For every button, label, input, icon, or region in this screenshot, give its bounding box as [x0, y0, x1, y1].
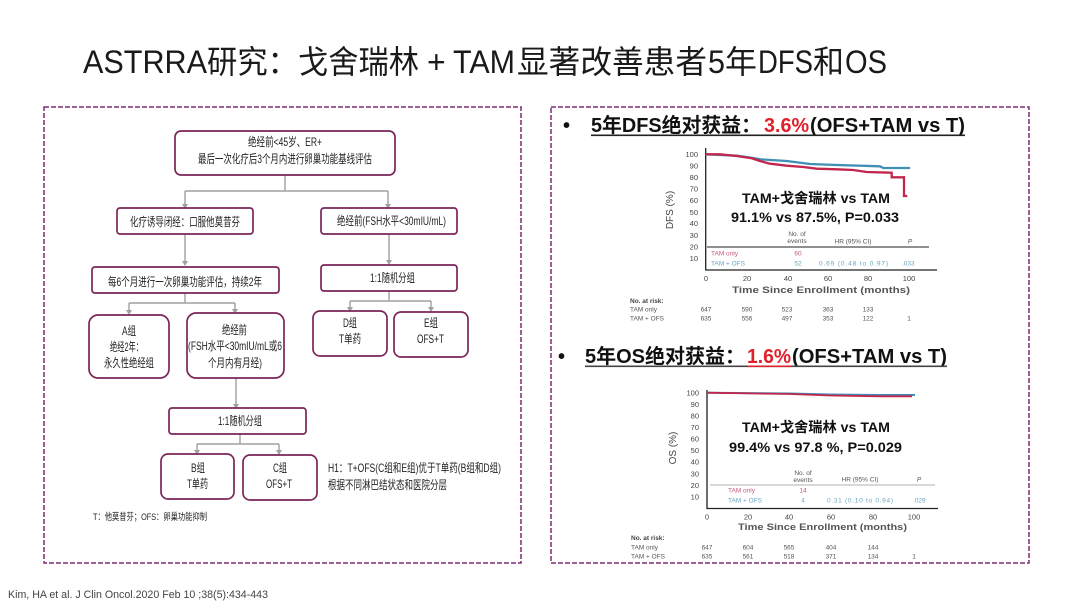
x axis labels [705, 512, 920, 522]
embedded table: P [908, 238, 913, 246]
hypothesis note: 根据不同淋巴结状态和医院分层 [328, 478, 447, 492]
box: group A: A组 [122, 324, 136, 338]
embedded table: P [917, 476, 922, 484]
y axis title: DFS (%) [665, 191, 676, 229]
title: DFS [758, 44, 813, 80]
x axis labels: 40 [784, 274, 792, 283]
x axis labels: 0 [704, 274, 708, 283]
x axis labels: 60 [827, 512, 835, 522]
heading: OS benefit: (OFS+TAM vs T) [792, 346, 947, 368]
at-risk table: 1 [912, 554, 916, 560]
curve: TAM + OFS [706, 154, 910, 168]
box: ovarian function assessment [92, 267, 279, 293]
at-risk table: 647 [701, 306, 712, 314]
y axis labels: 90 [691, 400, 699, 409]
y axis labels: 50 [691, 446, 699, 455]
panel: study design flowchart [44, 107, 521, 563]
embedded table: .033 [902, 260, 915, 268]
at-risk table: 1 [907, 316, 911, 322]
x axis labels: 100 [908, 512, 920, 522]
heading: DFS benefit: • [563, 115, 570, 137]
heading: DFS benefit: 5年DFS绝对获益： [591, 113, 761, 137]
embedded table: 14 [799, 488, 807, 494]
heading: OS benefit: • [558, 346, 565, 368]
y axis labels: 30 [691, 470, 699, 478]
heading: DFS benefit: 3.6% [764, 115, 809, 137]
x axis labels: 80 [869, 512, 877, 522]
at-risk table: 556 [742, 316, 753, 322]
at-risk table: TAM only [631, 544, 659, 552]
box: eligibility: 绝经前<45岁、ER+ [248, 134, 322, 149]
y axis title: OS (%) [668, 432, 679, 464]
at-risk table: TAM + OFS [630, 316, 665, 322]
box: premenopausal FSH: 绝经前(FSH水平<30mIU/mL) [337, 213, 446, 228]
box: group C: C组 [273, 461, 287, 475]
curve: TAM + OFS [707, 393, 915, 395]
box: eligibility [175, 131, 395, 175]
y axis labels: 100 [686, 388, 699, 398]
at-risk table: 133 [863, 306, 874, 314]
flowchart [89, 131, 501, 523]
curve: TAM only [707, 393, 912, 396]
at-risk table: 353 [823, 316, 834, 322]
y axis labels: 60 [690, 196, 698, 205]
box: premenopausal: 个月内有月经) [208, 356, 262, 370]
embedded table [707, 231, 929, 268]
embedded table: No. of [788, 231, 806, 238]
x axis labels: 60 [824, 274, 832, 283]
box: group B: T单药 [187, 477, 208, 491]
title: OS [845, 44, 887, 80]
box: group C [243, 455, 317, 500]
y axis labels: 40 [691, 458, 699, 466]
title: ASTRRA [83, 44, 208, 80]
x axis labels: 0 [705, 512, 709, 522]
box: group B: B组 [191, 461, 205, 475]
title: 年 [725, 44, 757, 80]
panel: survival results [551, 107, 1029, 563]
box: group E: OFS+T [417, 332, 444, 346]
at-risk table: 134 [868, 554, 879, 560]
title: 和 [813, 44, 844, 80]
box: group A: 绝经2年： [110, 339, 143, 354]
y axis labels: 80 [691, 412, 699, 420]
callout: DFS result: 91.1% vs 87.5%, P=0.033 [731, 209, 899, 225]
y axis labels: 70 [690, 184, 698, 194]
callout: DFS result: TAM+戈舍瑞林 vs TAM [742, 190, 890, 206]
x axis labels: 20 [743, 274, 751, 283]
curve: TAM only [706, 154, 907, 196]
embedded table: 0.31 (0.10 to 0.94) [827, 498, 893, 504]
title: 显著改善患者 [517, 44, 707, 80]
box: group C: OFS+T [266, 477, 292, 491]
embedded table: events [787, 238, 807, 245]
box: premenopausal FSH [321, 208, 457, 234]
y axis labels: 10 [690, 254, 698, 263]
callout: OS result [729, 419, 902, 455]
title: 戈舍瑞林 [298, 44, 419, 80]
box: premenopausal: (FSH水平<30mIU/mL或6 [188, 339, 282, 353]
callout: OS result: TAM+戈舍瑞林 vs TAM [742, 419, 890, 435]
heading: DFS benefit [563, 113, 965, 137]
y axis labels: 60 [691, 434, 699, 444]
box: group D: D组 [343, 316, 357, 330]
axes [707, 390, 938, 508]
y axis labels: 30 [690, 231, 698, 240]
embedded table: TAM + OFS [711, 260, 746, 268]
at-risk table: 635 [702, 554, 713, 560]
y axis labels: 20 [691, 481, 699, 490]
connector arrows [126, 175, 434, 455]
callout: DFS result [731, 190, 899, 225]
box: randomisation right: 1:1随机分组 [370, 270, 415, 285]
heading: OS benefit: 5年OS绝对获益： [585, 344, 745, 368]
y axis labels: 70 [691, 423, 699, 432]
y axis labels [686, 388, 699, 502]
at-risk table: No. at risk: [630, 298, 664, 305]
at-risk table [630, 298, 911, 322]
box: premenopausal [187, 313, 284, 378]
embedded table: 4 [801, 498, 805, 504]
at-risk table [631, 535, 916, 560]
at-risk table: 604 [743, 544, 754, 552]
box: eligibility: 最后一次化疗后3个月内进行卵巢功能基线评估 [198, 152, 372, 166]
y axis labels: 90 [690, 162, 698, 170]
axes [706, 148, 937, 270]
y axis labels: 80 [690, 173, 698, 182]
y axis labels: 10 [691, 492, 699, 502]
box: group B [161, 454, 234, 499]
x axis title: Time Since Enrollment (months) [738, 522, 907, 533]
title: 5 [708, 44, 725, 80]
at-risk table: 561 [743, 554, 754, 560]
embedded table: 52 [794, 260, 802, 268]
hypothesis note: H1：T+OFS(C组和E组)优于T单药(B组和D组) [328, 461, 501, 475]
y axis labels: 50 [690, 208, 698, 217]
at-risk table: 590 [742, 306, 753, 314]
at-risk table: 565 [784, 544, 795, 552]
embedded table: TAM only [711, 250, 739, 258]
abbreviations note: T：他莫昔芬；OFS：卵巢功能抑制 [93, 511, 207, 523]
y axis labels: 20 [690, 242, 698, 252]
embedded table: No. of [794, 470, 812, 477]
citation: Kim, HA et al. J Clin Oncol.2020 Feb 10 ;38(5):434-443 [8, 589, 268, 601]
panel border left [44, 107, 521, 563]
x axis labels: 100 [903, 274, 915, 283]
at-risk table: No. at risk: [631, 535, 665, 542]
y axis labels [685, 150, 698, 263]
hypothesis note [328, 461, 501, 492]
embedded table: 60 [794, 250, 802, 258]
at-risk table: 497 [782, 316, 793, 322]
title: + [427, 44, 446, 80]
box: ovarian function assessment: 每6个月进行一次卵巢功能评估，持续2年 [108, 274, 262, 289]
embedded table: HR (95% CI) [835, 238, 871, 246]
at-risk table: 523 [782, 306, 793, 314]
at-risk table: 122 [863, 316, 874, 322]
box: group D: T单药 [339, 332, 361, 346]
embedded table: TAM only [728, 488, 756, 494]
embedded table: events [793, 477, 813, 484]
box: premenopausal: 绝经前 [222, 322, 247, 337]
chart: OS Kaplan-Meier [631, 388, 938, 560]
at-risk table: 371 [826, 554, 837, 560]
at-risk table: 647 [702, 544, 713, 552]
embedded table: 0.69 (0.48 to 0.97) [819, 260, 888, 268]
box: randomisation lower: 1:1随机分组 [218, 413, 262, 428]
y axis labels: 100 [685, 150, 698, 159]
chart: DFS Kaplan-Meier [630, 148, 937, 322]
embedded table [710, 470, 935, 504]
x axis labels: 20 [744, 512, 752, 522]
title [83, 44, 887, 80]
x axis labels: 40 [785, 512, 793, 522]
x axis labels [704, 274, 915, 283]
panel border right [551, 107, 1029, 563]
box: group D [313, 311, 387, 356]
at-risk table: TAM + OFS [631, 554, 666, 560]
x axis labels: 80 [864, 274, 872, 283]
embedded table: HR (95% CI) [842, 476, 878, 484]
box: chemo-induced amenorrhea [117, 208, 253, 234]
box: randomisation lower [169, 408, 306, 434]
x axis title: Time Since Enrollment (months) [732, 285, 910, 296]
title: TAM [453, 44, 515, 80]
box: chemo-induced amenorrhea: 化疗诱导闭经：口服他莫昔芬 [130, 215, 240, 229]
at-risk table: TAM only [630, 306, 658, 314]
at-risk table: 144 [868, 544, 879, 552]
heading: OS benefit [558, 344, 947, 368]
box: randomisation right [321, 265, 457, 291]
at-risk table: 363 [823, 306, 834, 314]
embedded table: .029 [913, 498, 926, 504]
y axis labels: 40 [690, 219, 698, 228]
at-risk table: 518 [784, 554, 795, 560]
heading: OS benefit: 1.6% [747, 346, 791, 368]
box: group E [394, 312, 468, 357]
callout: OS result: 99.4% vs 97.8 %, P=0.029 [729, 439, 902, 455]
title: 研究： [207, 44, 298, 80]
embedded table: TAM + OFS [728, 498, 763, 504]
box: group A: 永久性绝经组 [104, 355, 154, 370]
box: group E: E组 [424, 316, 438, 330]
box: group A [89, 315, 169, 378]
at-risk table: 404 [826, 544, 837, 552]
heading: DFS benefit: (OFS+TAM vs T) [810, 115, 965, 137]
at-risk table: 635 [701, 316, 712, 322]
